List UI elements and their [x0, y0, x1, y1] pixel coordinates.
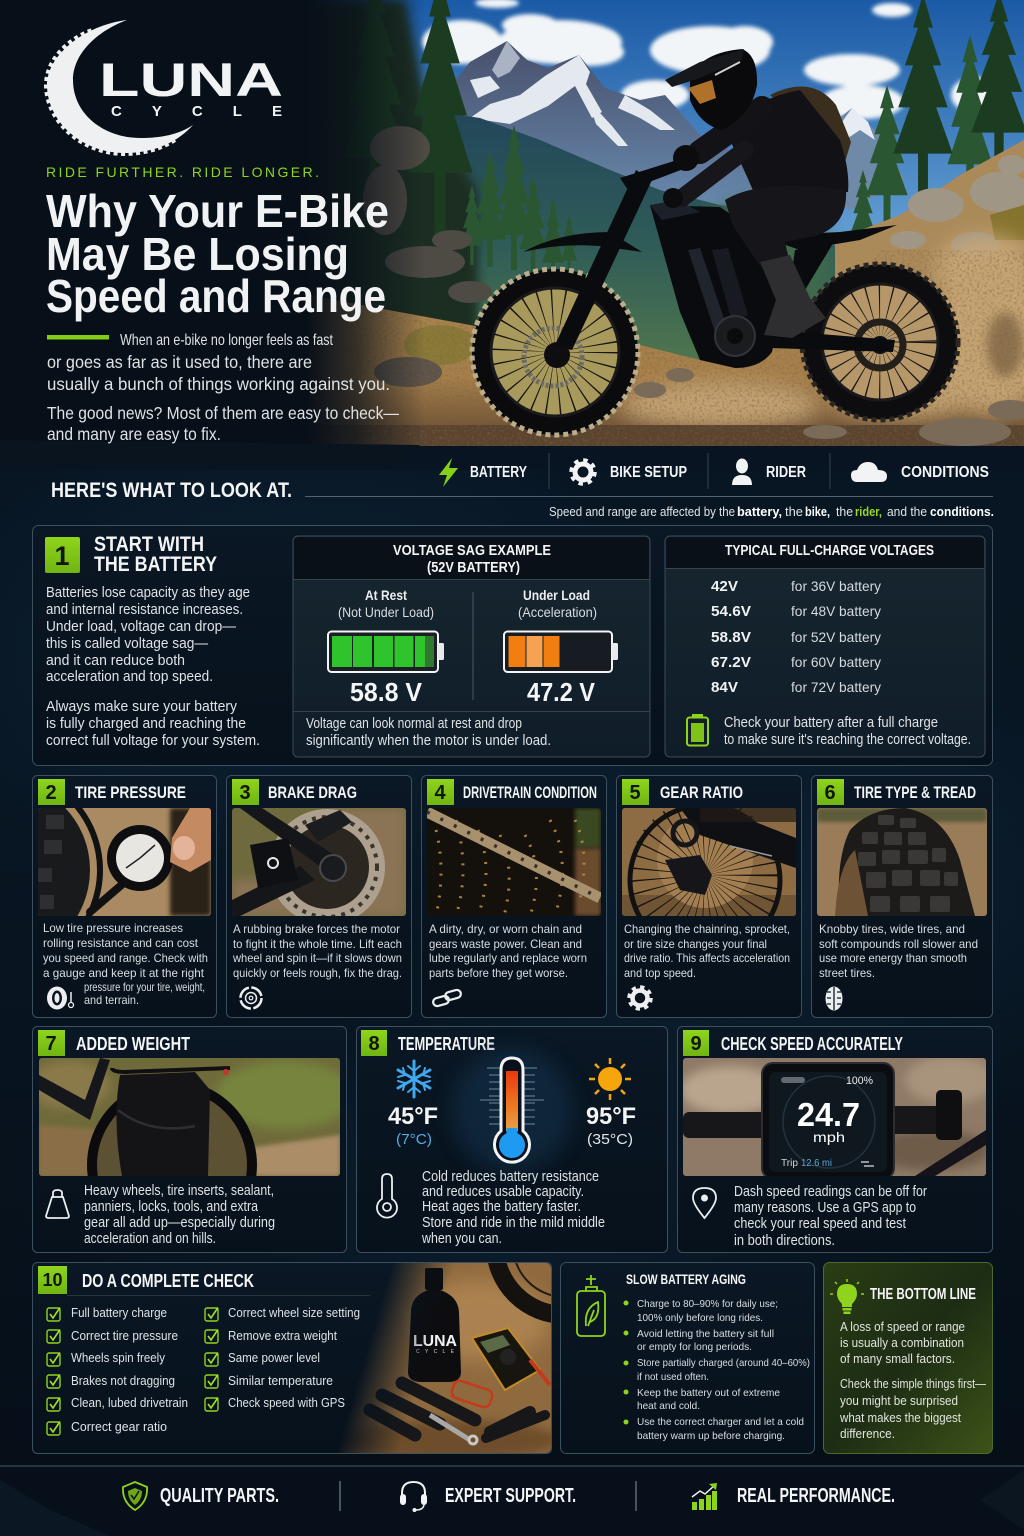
checklist column two: Check speed with GPS	[228, 1395, 345, 1410]
hot reading	[586, 1103, 636, 1148]
tire type text: soft compounds roll slower and	[819, 937, 978, 951]
checklist column one: Correct gear ratio	[71, 1419, 167, 1434]
checklist column one: Full battery charge	[71, 1305, 167, 1320]
icon: light bulb	[830, 1279, 864, 1314]
heading 9: CHECK SPEED ACCURATELY	[721, 1034, 903, 1054]
voltage sag panel: 47.2 V	[527, 677, 596, 707]
temperature text: and reduces usable capacity.	[422, 1183, 584, 1200]
category caption: battery,	[737, 505, 782, 519]
icon: snowflake	[398, 1061, 430, 1097]
icon: eco battery	[577, 1275, 605, 1336]
photo: speed display: Trip	[781, 1158, 798, 1169]
badge 1: 1	[54, 541, 70, 571]
gear ratio text: and top speed.	[624, 966, 696, 980]
brake drag text: wheel and spin it—if it slows down	[232, 951, 402, 965]
voltage sag panel	[293, 536, 650, 757]
gear ratio text: or tire size changes your final	[624, 937, 767, 951]
battery tips list: Use the correct charger and let a cold	[637, 1416, 804, 1428]
tagline: RIDE FURTHER. RIDE LONGER.	[46, 164, 319, 180]
added weight text: gear all add up—especially during	[84, 1214, 275, 1231]
drivetrain text: gears waste power. Clean and	[429, 937, 582, 951]
battery tips list: 100% only before long rides.	[637, 1312, 763, 1324]
logo: Luna Cycle: CYCLE	[111, 103, 282, 120]
battery body text: and internal resistance increases.	[46, 601, 243, 618]
category caption	[549, 505, 994, 519]
speed text: in both directions.	[734, 1232, 835, 1249]
category: battery	[439, 458, 527, 487]
tire type text: use more energy than smooth	[819, 951, 967, 965]
tire pressure text: and terrain.	[84, 993, 139, 1007]
battery tips list: Store partially charged (around 40–60%)	[637, 1357, 810, 1369]
heading 1: START WITH	[94, 533, 204, 556]
mountains	[456, 41, 752, 206]
added weight text: panniers, locks, tools, and extra	[84, 1198, 259, 1215]
badge 8: 8	[368, 1033, 380, 1055]
icon: gear	[629, 987, 651, 1009]
tire pressure text: a gauge and keep it at the right	[43, 966, 205, 980]
title: Why Your E-Bike	[46, 185, 389, 237]
photo: rear derailleur	[622, 808, 796, 916]
panel 4: drivetrain condition	[422, 776, 606, 1018]
bottom line text: of many small factors.	[840, 1351, 955, 1366]
voltage sag panel: At Rest	[365, 587, 407, 603]
panel 7: added weight	[30, 1026, 355, 1252]
intro text: The good news? Most of them are easy to check—	[47, 403, 399, 423]
heading 1: THE BATTERY	[94, 553, 217, 576]
title: Speed and Range	[46, 270, 386, 322]
badge 5: 5	[629, 782, 641, 804]
photo: loaded pannier	[39, 1058, 340, 1176]
heading rule	[305, 496, 993, 498]
category caption: conditions.	[930, 505, 994, 519]
gravel strip	[360, 250, 1024, 446]
tire pressure text: you speed and range. Check with	[43, 951, 208, 965]
thermometer graphic	[452, 1048, 572, 1172]
heading 6: TIRE TYPE & TREAD	[854, 783, 976, 802]
badge 7	[38, 1030, 65, 1056]
battery body text: acceleration and top speed.	[46, 668, 213, 685]
ground and dirt	[314, 298, 1024, 425]
panel 5: gear ratio	[616, 776, 802, 1018]
icon: shield	[123, 1482, 147, 1510]
temperature text: Cold reduces battery resistance	[422, 1168, 599, 1185]
cold reading	[388, 1103, 438, 1148]
badge 10: 10	[42, 1270, 63, 1290]
photo: speed display: 100%	[846, 1075, 873, 1087]
badge 8	[361, 1030, 387, 1056]
category: battery: BATTERY	[470, 464, 527, 481]
heading 7: ADDED WEIGHT	[76, 1034, 190, 1054]
badge 2: 2	[45, 782, 57, 804]
tire type text: street tires.	[819, 966, 875, 980]
brake drag text: quickly or feels rough, fix the drag.	[233, 966, 402, 980]
category: conditions: CONDITIONS	[901, 464, 989, 481]
badge 7: 7	[45, 1033, 57, 1055]
speed text: Dash speed readings can be off for	[734, 1183, 927, 1200]
category caption: rider,	[855, 505, 882, 519]
icon: brake disc	[240, 988, 262, 1008]
badge 4	[427, 779, 454, 805]
badge 10	[38, 1266, 67, 1294]
voltage sag panel: significantly when the motor is under load.	[306, 732, 551, 749]
icon: tire and valve	[47, 986, 74, 1010]
voltage sag panel: (52V BATTERY)	[427, 560, 520, 576]
icon: growth chart	[692, 1483, 717, 1510]
intro text: When an e-bike no longer feels as fast	[120, 332, 333, 349]
hillside rocks	[890, 155, 1024, 258]
heading 3: BRAKE DRAG	[268, 783, 357, 802]
full-charge voltages panel: for 52V battery	[791, 629, 881, 645]
gear ratio text: drive ratio. This affects acceleration	[624, 951, 790, 965]
brake drag text: A rubbing brake forces the motor	[233, 922, 400, 936]
checklist column one: Clean, lubed drivetrain	[71, 1395, 188, 1410]
full-charge voltages panel: 54.6V	[711, 603, 751, 620]
right hillside	[835, 140, 1024, 284]
voltage sag panel: 58.8 V	[350, 677, 423, 707]
battery body text	[46, 584, 260, 749]
voltage sag panel: Voltage can look normal at rest and drop	[306, 715, 522, 732]
checklist column one	[47, 1305, 188, 1435]
category: conditions	[851, 462, 989, 482]
bottom line text: what makes the biggest	[839, 1410, 961, 1425]
drivetrain text	[429, 922, 587, 980]
full-charge voltages panel: to make sure it's reaching the correct voltage.	[724, 731, 971, 748]
rear wheel	[802, 264, 958, 420]
intro text: usually a bunch of things working against you.	[47, 374, 390, 394]
gear ratio text	[624, 922, 790, 980]
full-charge voltages panel: TYPICAL FULL-CHARGE VOLTAGES	[725, 542, 934, 559]
heading: the bottom line: THE BOTTOM LINE	[870, 1286, 976, 1303]
voltage sag panel: (Acceleration)	[518, 604, 597, 620]
hot reading: 95°F	[586, 1103, 636, 1130]
panel 2: tire pressure	[32, 775, 217, 1018]
battery body text: this is called voltage sag—	[46, 635, 208, 652]
brake drag text: to fight it the whole time. Lift each	[233, 937, 402, 951]
full-charge voltages panel: for 60V battery	[791, 654, 881, 670]
badge 5	[622, 779, 649, 805]
category caption: bike,	[805, 505, 830, 519]
voltage sag panel: Under Load	[523, 587, 590, 603]
badge 2	[38, 779, 65, 805]
panel 8: temperature	[356, 1026, 668, 1252]
hero left dark panel	[0, 0, 1024, 470]
battery body text: Under load, voltage can drop—	[46, 618, 236, 635]
photo: speed display: 12.6 mi	[801, 1158, 832, 1169]
heading: slow battery aging: SLOW BATTERY AGING	[626, 1272, 746, 1287]
temperature text: Store and ride in the mild middle	[422, 1214, 605, 1231]
icon: thermometer outline	[377, 1174, 397, 1218]
added weight text	[84, 1182, 275, 1247]
panel: the bottom line	[824, 1262, 992, 1454]
footer: real performance: REAL PERFORMANCE.	[737, 1485, 895, 1507]
hero illustration: rider on e-bike in mountains	[280, 0, 1024, 446]
checklist column two: Correct wheel size setting	[228, 1305, 360, 1320]
checklist column two	[205, 1305, 360, 1411]
category: bike setup	[571, 460, 687, 484]
bottom line text: difference.	[840, 1426, 895, 1441]
full-charge voltages panel: Check your battery after a full charge	[724, 714, 938, 731]
tire type text	[819, 922, 978, 980]
speed text	[734, 1183, 927, 1249]
tire pressure text: rolling resistance and can cost	[43, 936, 199, 950]
heading 1	[94, 533, 217, 576]
badge 1	[45, 537, 80, 573]
category: rider: RIDER	[766, 464, 806, 481]
hot reading: (35°C)	[587, 1131, 633, 1148]
front wheel	[472, 269, 638, 435]
trail stones	[634, 368, 1024, 446]
added weight text: Heavy wheels, tire inserts, sealant,	[84, 1182, 274, 1199]
full-charge voltages panel: 67.2V	[711, 654, 751, 671]
icon: headset	[400, 1482, 427, 1512]
photo: speed display: mph	[813, 1129, 845, 1145]
footer bar	[0, 1466, 1024, 1536]
category: bike setup: BIKE SETUP	[610, 464, 687, 481]
battery gauge: at rest	[328, 632, 444, 672]
category caption: Speed and range are affected by the	[549, 505, 735, 519]
cold reading: 45°F	[388, 1103, 438, 1130]
panel 9: check speed accurately	[678, 1026, 995, 1252]
photo: speed display	[680, 1056, 995, 1179]
footer: quality parts: QUALITY PARTS.	[160, 1485, 279, 1507]
intro accent bar	[47, 335, 109, 340]
checklist column one: Correct tire pressure	[71, 1328, 178, 1343]
heading 4: DRIVETRAIN CONDITION	[463, 783, 597, 802]
voltage sag panel: (Not Under Load)	[338, 604, 434, 620]
full-charge voltages panel: for 72V battery	[791, 679, 881, 695]
full-charge voltages panel: 42V	[711, 578, 738, 595]
speed text: many reasons. Use a GPS app to	[734, 1199, 916, 1216]
drivetrain text: parts before they get worse.	[429, 966, 568, 980]
full-charge voltages panel: 84V	[711, 679, 738, 696]
heading 2: TIRE PRESSURE	[75, 783, 186, 802]
intro text: or goes as far as it used to, there are	[47, 352, 312, 372]
battery tips list: or empty for long periods.	[637, 1341, 752, 1353]
rider	[663, 49, 851, 338]
drivetrain text: lube regularly and replace worn	[429, 951, 587, 965]
left forest background	[314, 0, 484, 326]
full-charge voltages panel: for 48V battery	[791, 603, 881, 619]
checklist column two: Similar temperature	[228, 1373, 333, 1388]
title	[46, 185, 389, 322]
category caption: and the	[887, 505, 927, 519]
battery body text: Always make sure your battery	[46, 698, 237, 715]
tire pressure text: pressure for your tire, weight,	[84, 980, 205, 994]
full-charge voltages panel	[665, 536, 985, 757]
section heading: HERE'S WHAT TO LOOK AT.	[51, 479, 292, 502]
bottom line text	[839, 1319, 986, 1441]
icon: kettle weight	[46, 1190, 69, 1218]
checklist column one: Wheels spin freely	[71, 1350, 165, 1365]
tire type text: Knobby tires, wide tires, and	[819, 922, 965, 936]
photo: chain and cassette	[427, 808, 601, 916]
photo: tools and bottle: LUNA	[413, 1333, 457, 1350]
badge 3	[232, 779, 259, 805]
bottom line text: is usually a combination	[840, 1335, 964, 1350]
battery tips list: battery warm up before charging.	[637, 1430, 785, 1442]
photo: tools and bottle: CYCLE	[416, 1349, 455, 1355]
badge 9	[683, 1030, 709, 1056]
heading 10: DO A COMPLETE CHECK	[82, 1271, 254, 1291]
full-charge voltages panel: 58.8V	[711, 629, 751, 646]
bike frame	[523, 156, 897, 368]
checklist column one: Brakes not dragging	[71, 1373, 175, 1388]
bottom line text: Check the simple things first—	[840, 1376, 986, 1391]
badge 4: 4	[434, 782, 446, 804]
battery tips list: Keep the battery out of extreme	[637, 1387, 780, 1399]
battery body text: is fully charged and reaching the	[46, 715, 246, 732]
left rocks	[363, 126, 492, 303]
bottom line text: you might be surprised	[840, 1393, 958, 1408]
cold reading: (7°C)	[396, 1131, 432, 1148]
icon: chain link	[432, 989, 462, 1007]
forested ridge	[454, 115, 835, 360]
logo: Luna Cycle	[46, 20, 283, 154]
battery tips list: Avoid letting the battery sit full	[637, 1328, 774, 1340]
icon: charged battery	[687, 714, 708, 746]
photo: brake disc	[232, 808, 406, 917]
clouds	[422, 0, 999, 119]
gear ratio text: Changing the chainring, sprocket,	[624, 922, 790, 936]
temperature text: Heat ages the battery faster.	[422, 1198, 581, 1215]
tire pressure text	[43, 921, 208, 1007]
panel 1: start with the battery	[32, 526, 992, 766]
dust cloud	[620, 235, 1024, 429]
category caption: the	[836, 505, 853, 519]
battery body text: correct full voltage for your system.	[46, 732, 260, 749]
icon: location pin	[693, 1188, 716, 1218]
photo: tire gauge	[38, 808, 211, 916]
battery tips list: Charge to 80–90% for daily use;	[637, 1298, 778, 1310]
voltage sag panel: VOLTAGE SAG EXAMPLE	[393, 542, 551, 559]
badge 9: 9	[690, 1033, 702, 1055]
badge 6	[817, 779, 844, 805]
distant pines	[461, 35, 992, 283]
heading 8: TEMPERATURE	[398, 1034, 495, 1054]
footer: expert support: EXPERT SUPPORT.	[445, 1485, 576, 1507]
bottom line text: A loss of speed or range	[840, 1319, 965, 1334]
battery body text: Batteries lose capacity as they age	[46, 584, 250, 601]
category caption: the	[785, 505, 803, 519]
logo: Luna Cycle: LUNA	[99, 53, 283, 106]
intro text	[47, 332, 399, 444]
temperature text	[421, 1168, 605, 1247]
speed text: check your real speed and test	[734, 1215, 907, 1232]
panel 6: tire type and tread	[812, 776, 992, 1018]
panel: slow battery aging	[560, 1262, 814, 1454]
badge 3: 3	[239, 782, 251, 804]
battery gauge: under load	[504, 632, 618, 672]
checklist column two: Same power level	[228, 1350, 320, 1365]
panel 3: brake drag	[226, 776, 412, 1018]
intro text: and many are easy to fix.	[47, 424, 221, 444]
title: May Be Losing	[46, 228, 349, 280]
photo: tools and bottle	[340, 1263, 551, 1453]
battery body text: and it can reduce both	[46, 652, 185, 669]
brake drag text	[232, 922, 402, 980]
category: rider	[732, 458, 806, 485]
battery tips list	[624, 1298, 810, 1442]
photo: knobby tire	[817, 808, 987, 916]
temperature text: when you can.	[421, 1230, 502, 1247]
badge 6: 6	[824, 782, 836, 804]
checklist column two: Remove extra weight	[228, 1328, 337, 1343]
battery tips list: if not used often.	[637, 1371, 709, 1383]
full-charge voltages panel: for 36V battery	[791, 578, 881, 594]
battery tips list: heat and cold.	[637, 1400, 700, 1412]
heading 5: GEAR RATIO	[660, 783, 743, 802]
panel 10: do a complete check	[32, 1262, 552, 1454]
icon: tire tread	[826, 986, 842, 1010]
drivetrain text: A dirty, dry, or worn chain and	[429, 922, 582, 936]
icon: sun	[589, 1058, 631, 1100]
photo: speed display: 24.7	[797, 1096, 860, 1133]
added weight text: acceleration and on hills.	[84, 1230, 216, 1247]
tire pressure text: Low tire pressure increases	[43, 921, 183, 935]
